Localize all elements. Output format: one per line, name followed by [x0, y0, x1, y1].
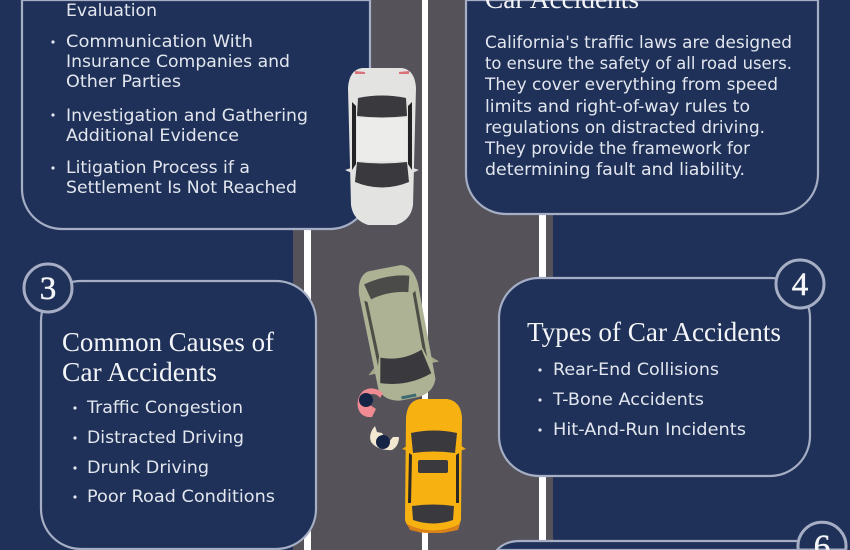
panel: common causes: Common Causes of — [62, 327, 274, 357]
panel: legal help steps: Additional Evidence — [66, 126, 239, 145]
panel: California traffic laws: They cover everything from speed — [484, 75, 778, 94]
panel: legal help steps: Settlement Is Not Reached — [66, 178, 297, 197]
icon: yellow car — [402, 399, 466, 533]
panel: common causes: Distracted Driving — [87, 428, 244, 447]
panel: common causes: Car Accidents — [62, 357, 217, 387]
panel: California traffic laws — [466, 0, 818, 214]
icon: green car — [349, 261, 445, 406]
panel: California traffic laws: regulations on distracted driving. — [485, 118, 765, 137]
icon: person in cream — [370, 426, 399, 450]
number badge 4: 4 — [792, 267, 808, 303]
number badge 4 — [776, 260, 824, 308]
panel: legal help steps: Other Parties — [66, 72, 181, 91]
panel: California traffic laws: California's traffic laws are designed — [485, 33, 792, 52]
number badge 3: 3 — [40, 271, 56, 307]
road — [293, 0, 553, 550]
number badge 6 — [798, 522, 846, 550]
number badge 3 — [24, 264, 72, 312]
panel: legal help steps: Communication With — [66, 32, 253, 51]
panel: legal help steps — [22, 0, 370, 229]
panel: types of accidents: Rear-End Collisions — [553, 360, 719, 379]
panel: types of accidents: Types of Car Accidents — [527, 317, 781, 347]
panel: California traffic laws: They provide the framework for — [484, 139, 750, 158]
panel: common causes: Poor Road Conditions — [87, 487, 275, 506]
panel: common causes: Traffic Congestion — [86, 398, 243, 417]
panel: legal help steps: Investigation and Gathering — [66, 106, 308, 125]
panel: types of accidents: T-Bone Accidents — [552, 390, 704, 409]
panel: bottom right — [497, 541, 827, 550]
panel: legal help steps: Litigation Process if a — [66, 158, 250, 177]
panel: California traffic laws: determining fault and liability. — [485, 160, 745, 179]
panel: common causes: Drunk Driving — [87, 458, 209, 477]
panel: types of accidents: Hit-And-Run Incidents — [553, 420, 746, 439]
icon: white car — [345, 68, 419, 225]
icon: person in pink — [358, 388, 383, 417]
panel: California traffic laws: to ensure the safety of all road users. — [485, 54, 792, 73]
panel: types of accidents — [499, 278, 810, 476]
panel: legal help steps: Insurance Companies and — [66, 52, 290, 71]
panel: legal help steps: Evaluation — [66, 1, 157, 20]
panel: common causes — [41, 281, 316, 549]
panel: California traffic laws: limits and right-of-way rules to — [485, 97, 750, 116]
